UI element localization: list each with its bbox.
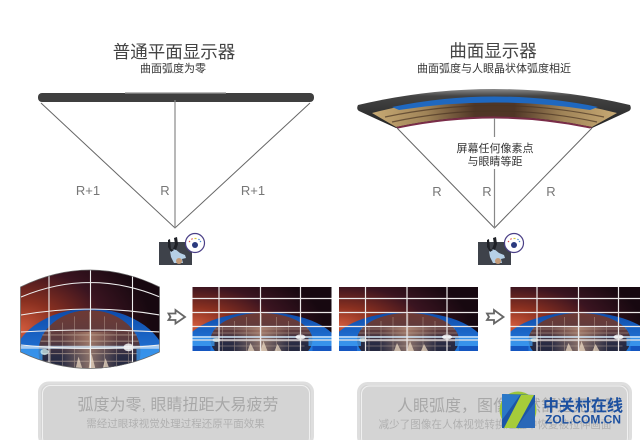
callout: equal distance: 与眼睛等距 — [468, 154, 522, 168]
image: flat source right — [330, 287, 486, 386]
watermark: ZOL logo — [500, 392, 623, 428]
label: R right: R — [546, 184, 556, 199]
distance lines: curved — [397, 128, 592, 228]
label: R+1 left: R+1 — [76, 183, 100, 198]
arrow: left pair — [168, 310, 185, 324]
panel: flat monitor diagram — [38, 42, 314, 265]
subheading: flat monitor: 曲面弧度为零 — [140, 61, 206, 75]
label: R centre: R — [160, 183, 170, 198]
heading: flat monitor: 普通平面显示器 — [113, 42, 235, 62]
image: warped screen view — [20, 270, 160, 369]
centre distance line: curved — [494, 118, 496, 228]
logo url: ZOL.COM.CN — [545, 412, 621, 426]
flat monitor top view — [38, 92, 314, 102]
logo text: 中关村在线 — [543, 396, 623, 415]
arrow: right pair — [487, 310, 504, 324]
curved monitor top view — [357, 89, 631, 128]
icon: viewer seated — [478, 234, 524, 265]
distance lines: flat — [41, 103, 310, 228]
panel: curved monitor caption — [358, 384, 630, 440]
caption text: curved: 减少了图像在人体视觉转换过程中恢复被拉伸画面 — [378, 418, 612, 431]
caption text: flat: 需经过眼球视觉处理过程还原平面效果 — [86, 417, 265, 430]
label: R left: R — [432, 184, 442, 199]
callout: equal distance: 屏幕任何像素点 — [456, 141, 534, 155]
image: flat result right — [502, 287, 640, 386]
subheading: curved monitor: 曲面弧度与人眼晶状体弧度相近 — [417, 61, 571, 75]
panel: curved monitor diagram — [357, 41, 631, 265]
label: R+1 right: R+1 — [241, 183, 265, 198]
image: flat result left — [184, 287, 340, 386]
label: R centre: R — [482, 184, 492, 199]
panel: flat monitor caption — [40, 383, 312, 440]
caption heading: flat: 弧度为零, 眼睛扭距大易疲劳 — [78, 396, 278, 414]
logo mark — [500, 392, 536, 428]
centre distance line: flat — [174, 100, 176, 228]
caption heading: curved: 人眼弧度，图像自然舒适无变形 — [397, 397, 621, 415]
icon: viewer seated — [159, 234, 204, 265]
callout: equal distance — [456, 141, 534, 168]
heading: curved monitor: 曲面显示器 — [449, 41, 537, 61]
